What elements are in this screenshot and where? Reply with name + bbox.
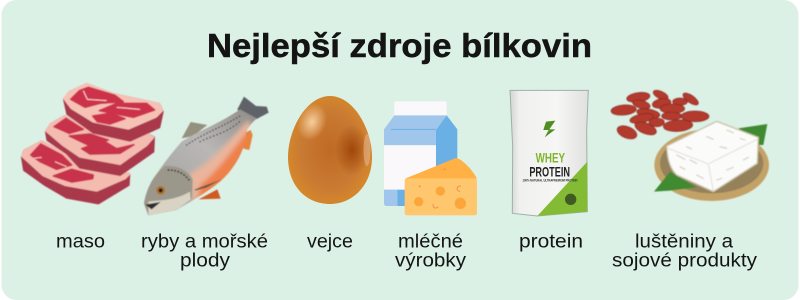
icon: milk carton and cheese <box>384 101 477 215</box>
beans <box>611 88 709 141</box>
bag text: 100% NATURAL ULTRAPREMIUM PROTEIN <box>522 178 578 182</box>
fins <box>182 122 253 199</box>
bag <box>510 90 588 216</box>
icon: meat slices <box>22 84 163 203</box>
mouth <box>145 202 161 209</box>
label: luštěniny a sojové produkty: sojové produkty <box>612 250 758 272</box>
icon: egg <box>288 96 372 204</box>
bag text: PROTEIN <box>529 164 570 180</box>
label: protein: protein <box>519 232 583 252</box>
green corner <box>537 162 587 216</box>
plate <box>654 129 769 201</box>
bottom slice <box>22 141 129 203</box>
tofu <box>667 121 758 192</box>
orange belly <box>188 119 252 201</box>
bag text <box>522 150 578 182</box>
label: luštěniny a sojové produkty: luštěniny a <box>635 232 733 252</box>
icon: beans and tofu <box>611 88 769 201</box>
eye <box>156 186 165 195</box>
label: ryby a mořské plody <box>141 232 268 272</box>
head <box>144 166 193 215</box>
label: maso: maso <box>56 232 105 252</box>
label: ryby a mořské plody: ryby a mořské <box>141 232 268 252</box>
tail <box>237 97 269 120</box>
title: Nejlepší zdroje bílkovin <box>207 27 592 64</box>
label: mléčné výrobky: mléčné <box>398 232 463 252</box>
body <box>144 109 257 215</box>
icon: fish <box>144 97 269 215</box>
speckles <box>187 115 242 145</box>
milk carton <box>384 101 457 206</box>
middle slice <box>46 116 154 175</box>
badge <box>565 194 576 205</box>
label: ryby a mořské plody: plody <box>180 250 231 272</box>
cheese <box>405 158 477 215</box>
bag text: WHEY <box>536 150 565 166</box>
label: mléčné výrobky <box>395 232 467 272</box>
label: luštěniny a sojové produkty <box>612 232 758 272</box>
icon: whey protein bag <box>510 90 588 216</box>
label: vejce: vejce <box>307 232 353 252</box>
label: mléčné výrobky: výrobky <box>395 250 467 272</box>
leaves <box>654 124 767 192</box>
top slice <box>64 84 163 141</box>
logo <box>543 121 555 137</box>
